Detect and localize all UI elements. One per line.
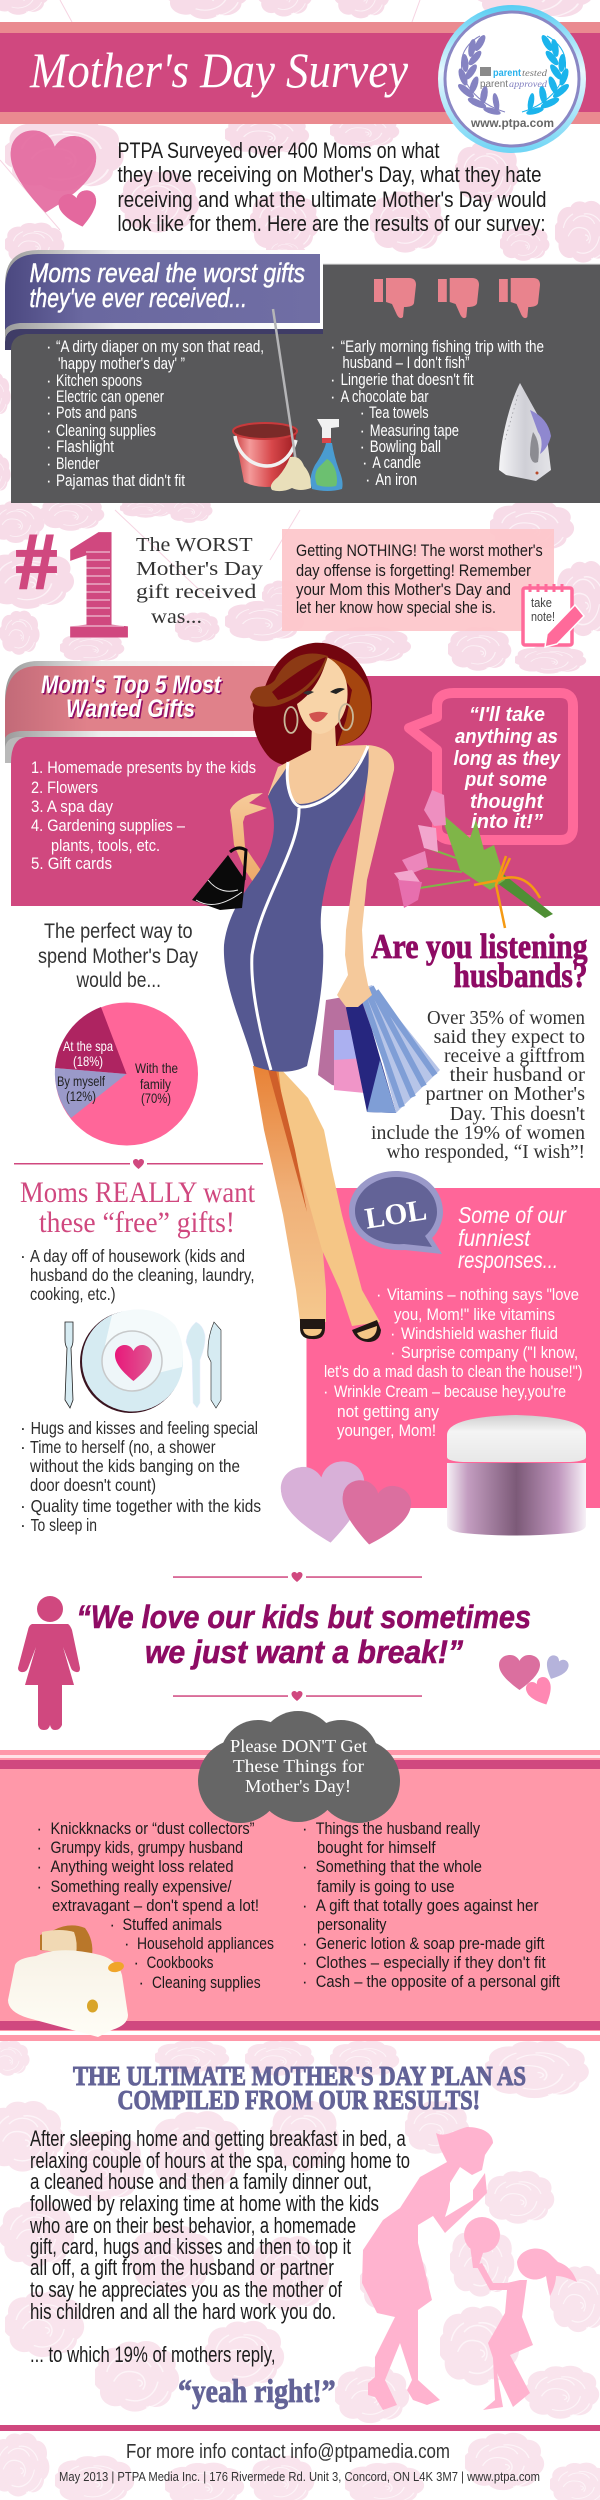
speech bubble: quote: “I'll take xyxy=(469,703,545,726)
text: husbands stats: partner on Mother's xyxy=(426,1083,585,1105)
text: perfect way: would be... xyxy=(76,969,161,992)
icon: tulips xyxy=(394,790,553,928)
heading: funniest responses: Some of our xyxy=(458,1202,567,1228)
left arm and hand xyxy=(230,793,267,900)
list: free gifts: · xyxy=(20,1246,26,1266)
icon: take note: take xyxy=(531,596,552,610)
text: ultimate plan body: to say he appreciates you as the mother of xyxy=(30,2277,343,2302)
#1 numeral: 1 xyxy=(61,500,133,668)
list: free gifts: · xyxy=(20,1496,26,1516)
list: funniest responses: Wrinkle Cream – because hey,you're xyxy=(334,1383,566,1401)
#1 numeral xyxy=(16,500,133,668)
list: don't get right: A gift that totally goes against her xyxy=(316,1897,539,1915)
left list: · xyxy=(46,372,52,390)
list: don't get left: extravagant – don't spend a lot! xyxy=(52,1897,259,1915)
text: perfect way: The perfect way to xyxy=(44,920,192,943)
list: funniest responses xyxy=(323,1286,582,1440)
shopping bags xyxy=(318,985,440,1113)
text: ultimate plan body xyxy=(29,2126,410,2367)
purse xyxy=(192,848,246,910)
heading ribbon: top 5: Wanted Gifts xyxy=(66,695,195,723)
text: ultimate plan body: followed by relaxing time at home with the kids xyxy=(30,2191,379,2216)
pie chart: (18%) xyxy=(73,1053,103,1069)
ribbon curl xyxy=(5,329,323,350)
background rose pattern: bottom xyxy=(0,2040,600,2500)
left list xyxy=(46,338,264,490)
footer contact: For more info contact info@ptpamedia.com xyxy=(126,2441,450,2463)
list: free gifts: · xyxy=(20,1418,26,1438)
panel: please don't get xyxy=(0,1711,600,2041)
list: don't get right: · xyxy=(302,1973,308,1991)
list: free gifts: husband do the cleaning, laundry, xyxy=(30,1265,254,1285)
daughter xyxy=(476,2263,533,2410)
text: worst gift: Mother's Day xyxy=(136,558,264,580)
#1 numeral: # xyxy=(16,518,57,606)
list: don't get left: Stuffed animals xyxy=(122,1916,222,1934)
icons: thumbs down xyxy=(374,278,540,318)
intro text xyxy=(118,138,546,236)
text: ultimate plan body: gift, card, hugs and kisses and then to top it xyxy=(30,2234,352,2259)
badge: PTPA parent tested parent approved: www.ptpa.com xyxy=(470,116,554,130)
divider xyxy=(173,1691,422,1701)
icon: plate with heart xyxy=(65,1309,221,1413)
panel: funniest responses xyxy=(306,1171,600,1508)
text: husbands stats: receive a giftfrom xyxy=(444,1045,585,1067)
icon: cream jar xyxy=(447,1415,586,1536)
list: don't get left: Knickknacks or “dust collectors” xyxy=(50,1820,254,1838)
list: don't get left: · xyxy=(36,1878,42,1896)
speech bubble: quote: thought xyxy=(470,790,544,813)
text: ultimate plan body: ... to which 19% of mothers reply, xyxy=(30,2342,276,2367)
list: free gifts: door doesn't count) xyxy=(30,1475,156,1495)
list: don't get left: Household appliances xyxy=(137,1935,274,1953)
text: ultimate plan body: his children and all the hard work you do. xyxy=(30,2299,336,2324)
divider xyxy=(173,1572,422,1582)
heading ribbon: top 5: Wanted Gifts xyxy=(68,696,197,724)
speech bubble: quote xyxy=(409,693,573,840)
pie chart xyxy=(55,1002,198,1146)
list: top 5 gifts: plants, tools, etc. xyxy=(51,837,160,855)
list: don't get left: · xyxy=(36,1839,42,1857)
text: worst gift: gift received xyxy=(136,581,256,603)
list: don't get right: bought for himself xyxy=(317,1839,436,1857)
right list: · xyxy=(360,422,365,440)
left list: · xyxy=(46,404,52,422)
right list: · xyxy=(330,338,336,356)
background rose pattern xyxy=(0,0,600,674)
right list: Measuring tape xyxy=(370,422,459,440)
list: don't get right: Things the husband really xyxy=(316,1820,481,1838)
dress xyxy=(224,745,369,1072)
list: funniest responses: · xyxy=(390,1325,396,1343)
list: don't get right: · xyxy=(302,1897,308,1915)
right list: Tea towels xyxy=(369,404,429,422)
list: don't get right: personality xyxy=(317,1916,387,1934)
text: worst gift xyxy=(136,534,264,628)
ribbon curl xyxy=(5,731,270,763)
text: husbands stats: said they expect to xyxy=(434,1026,585,1048)
text: ultimate plan body: who are on their best behavior, a homemade xyxy=(29,2213,356,2238)
pie chart: (12%) xyxy=(66,1088,96,1104)
right list: · xyxy=(330,371,336,389)
right list: A candle xyxy=(372,454,421,472)
list: don't get left xyxy=(36,1820,274,1992)
cloud heading: Please DON'T Get xyxy=(230,1736,367,1756)
pie chart: At the spa xyxy=(63,1038,113,1054)
list: don't get left: Cleaning supplies xyxy=(152,1974,261,1992)
list: free gifts: Hugs and kisses and feeling special xyxy=(31,1418,258,1438)
quote: need a break xyxy=(76,1599,531,1670)
left list: Pots and pans xyxy=(56,404,137,422)
list: don't get right: family is going to use xyxy=(317,1878,455,1896)
callout: getting nothing: Getting NOTHING! The worst mother's xyxy=(296,542,543,560)
list: free gifts: · xyxy=(20,1515,26,1535)
speech bubble: quote: anything as xyxy=(455,725,558,748)
list: don't get left: · xyxy=(134,1954,139,1972)
list: top 5 gifts: 1. Homemade presents by the kids xyxy=(31,759,256,777)
quote: need a break: we just want a break!” xyxy=(145,1634,463,1670)
right list: · xyxy=(365,471,370,489)
facial features xyxy=(303,688,345,722)
icon: hearts intro xyxy=(3,127,101,231)
heading: free gifts xyxy=(20,1176,256,1239)
list: free gifts: Time to herself (no, a shower xyxy=(30,1437,216,1457)
pie chart: (70%) xyxy=(141,1090,171,1106)
heading: ultimate plan: THE ULTIMATE MOTHER'S DAY PLAN AS xyxy=(73,2061,526,2091)
mother xyxy=(362,2127,493,2410)
intro text: PTPA Surveyed over 400 Moms on what xyxy=(118,138,440,163)
list: free gifts: To sleep in xyxy=(31,1515,97,1535)
left list: · xyxy=(46,438,52,456)
right list: · xyxy=(362,454,368,472)
list: don't get left: · xyxy=(124,1935,130,1953)
badge: PTPA parent tested parent approved: parent xyxy=(480,79,508,90)
heading ribbon: top 5: Mom's Top 5 Most xyxy=(42,672,224,700)
list: don't get right: · xyxy=(302,1820,308,1838)
left list: Flashlight xyxy=(56,438,114,456)
text: worst gift: The WORST xyxy=(136,534,253,556)
list: funniest responses: Surprise company ("I know, xyxy=(401,1344,578,1362)
right list xyxy=(330,338,544,489)
left list: · xyxy=(46,388,52,406)
text: ultimate plan body: all off, a gift from the husband or partner xyxy=(30,2255,334,2280)
daughter head and hair xyxy=(517,2248,577,2296)
list: free gifts: A day off of housework (kids and xyxy=(30,1246,245,1266)
icon: take note xyxy=(523,584,584,647)
left list: · xyxy=(46,455,52,473)
icon: toaster xyxy=(8,1925,128,2037)
cloud heading xyxy=(198,1711,400,1823)
heading: funniest responses: funniest xyxy=(458,1225,531,1251)
badge: PTPA parent tested parent approved: tested xyxy=(522,68,548,78)
list: don't get right: Clothes – especially if they don't fit xyxy=(316,1954,546,1972)
footer line xyxy=(0,2425,600,2431)
heading ribbon: top 5: Mom's Top 5 Most xyxy=(41,671,222,699)
speech bubble: quote: into it!” xyxy=(471,810,544,833)
icon: small hearts xyxy=(499,1653,571,1710)
list: don't get left: · xyxy=(36,1820,42,1838)
icon: mop xyxy=(271,309,311,491)
cloud heading: These Things for xyxy=(233,1756,364,1776)
callout: getting nothing: day offense is forgetting! Remember xyxy=(296,562,531,580)
pie chart: With the xyxy=(135,1060,178,1076)
callout: getting nothing xyxy=(282,529,554,631)
callout: getting nothing: your Mom this Mother's Day and xyxy=(296,581,511,599)
list: don't get right: Something that the whole xyxy=(316,1858,482,1876)
heading: funniest responses: responses... xyxy=(458,1247,558,1273)
left list: Blender xyxy=(56,455,100,473)
text: perfect way xyxy=(38,920,198,992)
heading: are you listening husbands xyxy=(371,927,588,995)
heading: ultimate plan: COMPILED FROM OUR RESULTS! xyxy=(118,2085,480,2115)
legs xyxy=(253,1066,380,1326)
bouquet xyxy=(464,2217,500,2253)
speech bubble: quote: long as they xyxy=(454,747,561,770)
dress trim xyxy=(252,746,368,1070)
list: don't get left: Cookbooks xyxy=(147,1954,214,1972)
icon: woman figure xyxy=(18,1596,80,1730)
right list: · xyxy=(360,404,365,422)
right list: · xyxy=(330,388,336,406)
list: don't get right xyxy=(302,1820,560,1991)
speech bubble: LOL xyxy=(349,1171,443,1254)
list: top 5 gifts: 4. Gardening supplies – xyxy=(31,817,186,835)
text: ultimate plan body: After sleeping home and getting breakfast in bed, a xyxy=(30,2126,406,2151)
text: husbands stats xyxy=(371,1007,585,1163)
list: don't get left: Grumpy kids, grumpy husband xyxy=(50,1839,243,1857)
silhouette: mother and daughter xyxy=(362,2127,577,2410)
quote: yeah right: “yeah right!” xyxy=(178,2374,336,2410)
hair back xyxy=(253,643,372,765)
heading: funniest responses xyxy=(458,1202,567,1273)
list: don't get right: · xyxy=(302,1935,308,1953)
list: free gifts: without the kids banging on the xyxy=(29,1456,240,1476)
right list: Lingerie that doesn't fit xyxy=(341,371,474,389)
list: don't get right: Cash – the opposite of a personal gift xyxy=(316,1973,560,1991)
list: don't get right: · xyxy=(302,1954,308,1972)
heading ribbon: worst gifts: Moms reveal the worst gifts xyxy=(30,258,305,288)
panel: top 5 wanted gifts xyxy=(5,661,600,906)
text: husbands stats: who responded, “I wish”! xyxy=(386,1141,585,1163)
heading ribbon: worst gifts xyxy=(5,250,323,342)
title: Mother's Day Survey xyxy=(29,42,409,98)
heading: ultimate plan xyxy=(73,2061,526,2115)
list: don't get left: · xyxy=(138,1974,144,1992)
list: funniest responses: you, Mom!" like vitamins xyxy=(394,1306,555,1324)
badge: PTPA parent tested parent approved: approved xyxy=(509,79,548,89)
list: don't get left: · xyxy=(36,1858,42,1876)
left list: Kitchen spoons xyxy=(56,372,142,390)
background stems xyxy=(0,0,420,600)
left list: · xyxy=(46,472,52,490)
list: funniest responses: · xyxy=(323,1383,328,1401)
panel: worst gifts xyxy=(5,250,600,503)
right list: Bowling ball xyxy=(370,438,441,456)
speech bubble: LOL: LOL xyxy=(363,1193,429,1236)
pie chart: By myself xyxy=(57,1073,105,1089)
chest and neck xyxy=(268,725,368,810)
list: top 5 gifts: 3. A spa day xyxy=(31,798,114,816)
woman illustration xyxy=(192,643,440,1342)
text: husbands stats: their husband or xyxy=(450,1064,585,1086)
list: free gifts: Quality time together with the kids xyxy=(31,1496,261,1516)
left list: 'happy mother's day' ” xyxy=(58,355,185,373)
icon: bucket xyxy=(233,423,297,487)
heading: free gifts: Moms REALLY want xyxy=(20,1176,256,1209)
list: top 5 gifts: 2. Flowers xyxy=(31,779,98,797)
list: funniest responses: · xyxy=(376,1286,382,1304)
callout: getting nothing: let her know how special she is. xyxy=(296,599,496,617)
list: don't get right: Generic lotion & soap pre-made gift xyxy=(316,1935,545,1953)
header banner xyxy=(0,22,600,124)
cloud heading: Mother's Day! xyxy=(245,1776,351,1796)
pie chart: family xyxy=(140,1076,171,1092)
heading ribbon: worst gifts: they've ever received... xyxy=(30,283,247,313)
list: funniest responses: younger, Mom! xyxy=(337,1422,436,1440)
list: free gifts xyxy=(20,1246,261,1535)
icon: hearts overlapping xyxy=(278,1459,414,1550)
left list: “A dirty diaper on my son that read, xyxy=(56,338,264,356)
text: perfect way: spend Mother's Day xyxy=(38,945,198,968)
list: don't get left: · xyxy=(110,1916,115,1934)
left list: Electric can opener xyxy=(56,388,164,406)
right arm xyxy=(337,745,394,1007)
right list: · xyxy=(360,438,365,456)
speech bubble: quote: put some xyxy=(464,768,547,791)
list: free gifts: cooking, etc.) xyxy=(30,1284,116,1304)
text: worst gift: was... xyxy=(151,606,202,628)
list: funniest responses: · xyxy=(390,1344,396,1362)
list: top 5 gifts: 5. Gift cards xyxy=(31,855,112,873)
left list: Cleaning supplies xyxy=(56,422,156,440)
icon: take note: note! xyxy=(531,610,555,624)
icon: spray bottle xyxy=(311,419,343,491)
quote: need a break: “We love our kids but sometimes xyxy=(76,1599,531,1635)
footer address: May 2013 | PTPA Media Inc. | 176 Rivermede Rd. Unit 3, Concord, ON L4K 3M7 | www.ptpa.com xyxy=(59,2469,540,2484)
list: funniest responses: Windshield washer fluid xyxy=(401,1325,558,1343)
text: husbands stats: Day. This doesn't xyxy=(450,1103,585,1125)
heading: free gifts: these “free” gifts! xyxy=(39,1206,235,1239)
face xyxy=(297,657,348,734)
list: free gifts: · xyxy=(20,1437,26,1457)
hair front xyxy=(250,653,328,707)
sandals xyxy=(300,1319,381,1342)
text: husbands stats: Over 35% of women xyxy=(427,1007,585,1029)
list: funniest responses: Vitamins – nothing says "love xyxy=(387,1286,579,1304)
list: don't get right: · xyxy=(302,1858,308,1876)
divider xyxy=(14,1159,263,1169)
right list: “Early morning fishing trip with the xyxy=(341,338,544,356)
icon: iron xyxy=(499,383,551,481)
badge: PTPA parent tested parent approved: parent xyxy=(493,68,522,79)
left list: Pajamas that didn't fit xyxy=(56,472,185,490)
text: ultimate plan body: relaxing couple of hours at the spa, coming home to xyxy=(30,2148,410,2173)
list: don't get left: Anything weight loss related xyxy=(50,1858,234,1876)
badge: PTPA parent tested parent approved xyxy=(438,5,586,153)
earrings xyxy=(284,704,353,733)
right list: husband – I don't fish” xyxy=(342,354,470,372)
left list: · xyxy=(46,422,52,440)
text: ultimate plan body: a cleaned house and then a family dinner out, xyxy=(30,2169,372,2194)
text: husbands stats: include the 19% of women xyxy=(371,1122,585,1144)
list: top 5 gifts xyxy=(31,759,256,873)
right list: A chocolate bar xyxy=(341,388,429,406)
list: funniest responses: not getting any xyxy=(337,1403,440,1421)
right list: An iron xyxy=(375,471,417,489)
left list: · xyxy=(46,338,52,356)
list: don't get left: Something really expensive/ xyxy=(50,1878,232,1896)
heading ribbon: top 5 xyxy=(5,661,280,750)
